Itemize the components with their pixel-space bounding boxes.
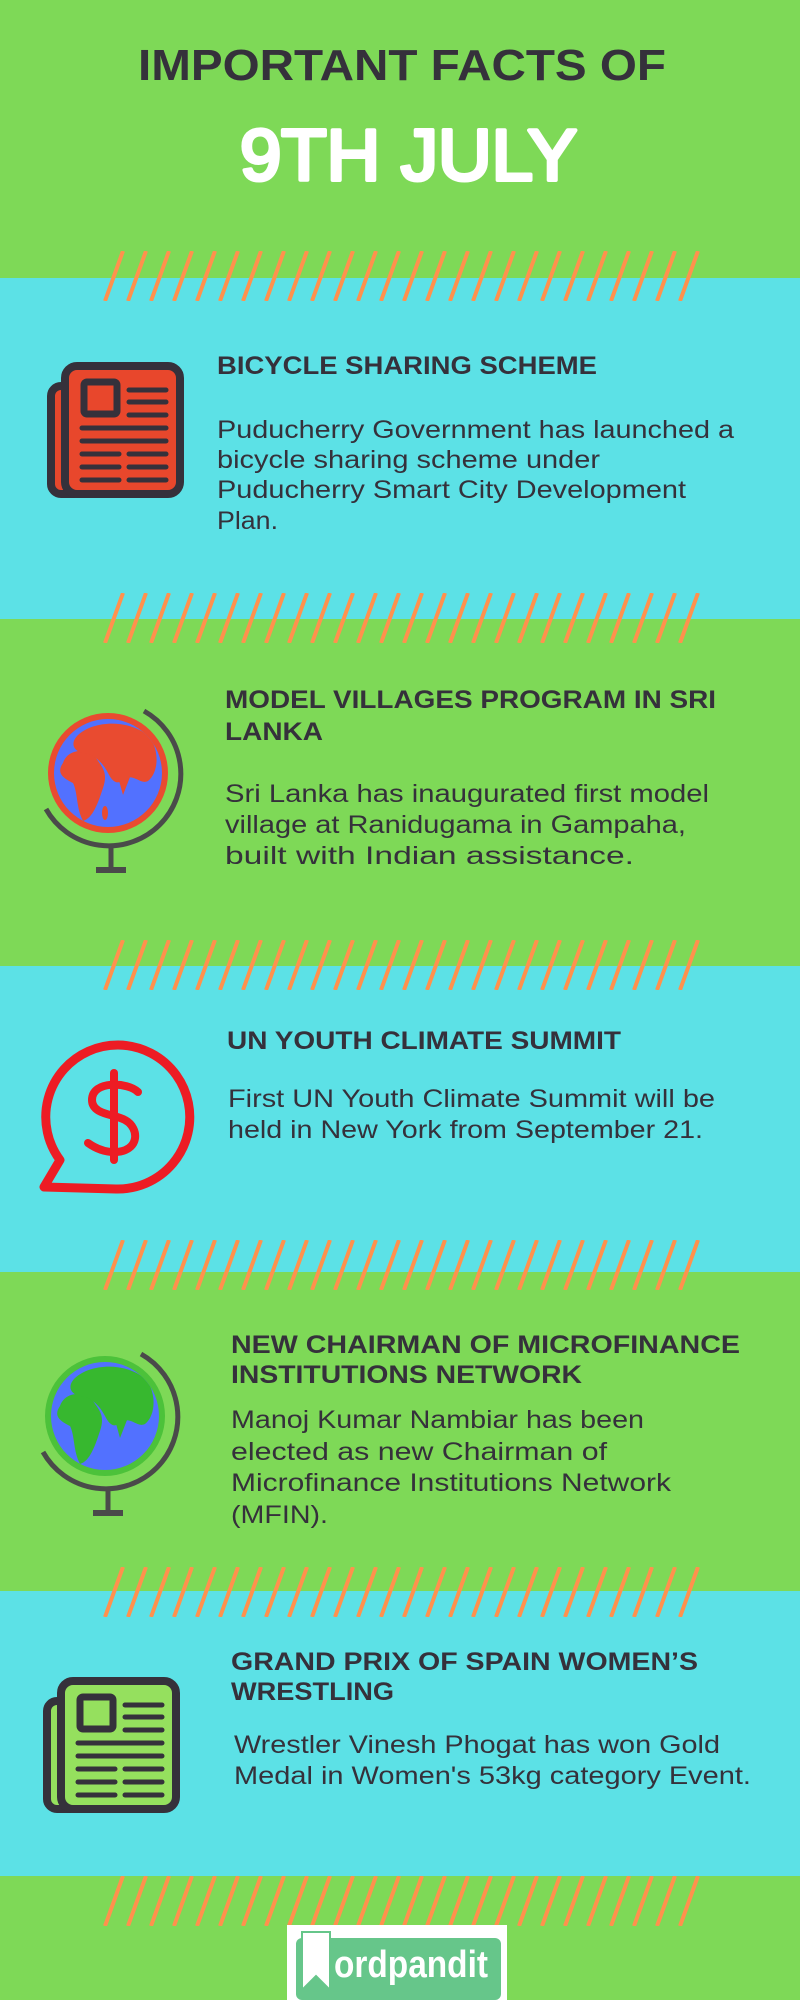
body text: Microfinance Institutions Network bbox=[231, 1469, 672, 1497]
panel: model villages bbox=[46, 686, 716, 870]
title bbox=[138, 41, 666, 196]
icon: dollar speech bubble bbox=[44, 1045, 190, 1189]
stripes header bbox=[103, 251, 701, 301]
icon: green newspaper bbox=[47, 1681, 176, 1809]
body text: Medal in Women's 53kg category Event. bbox=[234, 1762, 751, 1790]
logo: wordpandit bbox=[287, 1925, 507, 2000]
panel: bicycle sharing scheme bbox=[51, 352, 734, 535]
heading bbox=[225, 686, 716, 746]
body text: First UN Youth Climate Summit will be bbox=[228, 1085, 715, 1113]
title: IMPORTANT FACTS OF bbox=[138, 41, 666, 90]
logo: wordpandit: ordpandit bbox=[334, 1944, 488, 1986]
stripes 2 bbox=[103, 940, 701, 990]
body text: held in New York from September 21. bbox=[228, 1116, 703, 1144]
heading: UN YOUTH CLIMATE SUMMIT bbox=[227, 1027, 621, 1055]
title: 9TH JULY bbox=[240, 116, 577, 196]
panel: microfinance chairman bbox=[43, 1331, 740, 1529]
heading: NEW CHAIRMAN OF MICROFINANCE bbox=[231, 1331, 740, 1359]
heading: LANKA bbox=[225, 718, 323, 746]
body text: village at Ranidugama in Gampaha, bbox=[225, 811, 686, 839]
body text: Puducherry Government has launched a bbox=[217, 416, 734, 444]
stripes 1 bbox=[103, 593, 701, 643]
body text: Wrestler Vinesh Phogat has won Gold bbox=[234, 1731, 720, 1759]
icon: red newspaper bbox=[51, 366, 180, 494]
body text: built with Indian assistance. bbox=[225, 842, 634, 870]
heading: INSTITUTIONS NETWORK bbox=[231, 1361, 582, 1389]
body text bbox=[225, 780, 709, 870]
panel: UN youth climate summit bbox=[44, 1027, 715, 1189]
heading: BICYCLE SHARING SCHEME bbox=[217, 352, 597, 380]
panel: grand prix wrestling bbox=[47, 1648, 751, 1809]
heading bbox=[231, 1331, 740, 1389]
body text: Manoj Kumar Nambiar has been bbox=[231, 1406, 644, 1434]
stripes 3 bbox=[103, 1240, 701, 1290]
body text: bicycle sharing scheme under bbox=[217, 446, 600, 474]
heading: WRESTLING bbox=[231, 1678, 394, 1706]
body text bbox=[231, 1406, 672, 1529]
body text: (MFIN). bbox=[231, 1501, 328, 1529]
body text: Puducherry Smart City Development bbox=[217, 476, 686, 504]
body text: elected as new Chairman of bbox=[231, 1438, 607, 1466]
body text bbox=[228, 1085, 715, 1144]
icon: green globe bbox=[43, 1354, 178, 1513]
body text: Plan. bbox=[217, 507, 278, 535]
icon: red globe bbox=[46, 711, 181, 870]
heading bbox=[231, 1648, 698, 1706]
heading: MODEL VILLAGES PROGRAM IN SRI bbox=[225, 686, 716, 714]
body text bbox=[217, 416, 734, 535]
stripes 4 bbox=[103, 1567, 701, 1617]
stripes 5 bbox=[103, 1876, 701, 1926]
backgrounds bbox=[0, 0, 800, 278]
heading: GRAND PRIX OF SPAIN WOMEN’S bbox=[231, 1648, 698, 1676]
body text bbox=[234, 1731, 751, 1790]
body text: Sri Lanka has inaugurated first model bbox=[225, 780, 709, 808]
